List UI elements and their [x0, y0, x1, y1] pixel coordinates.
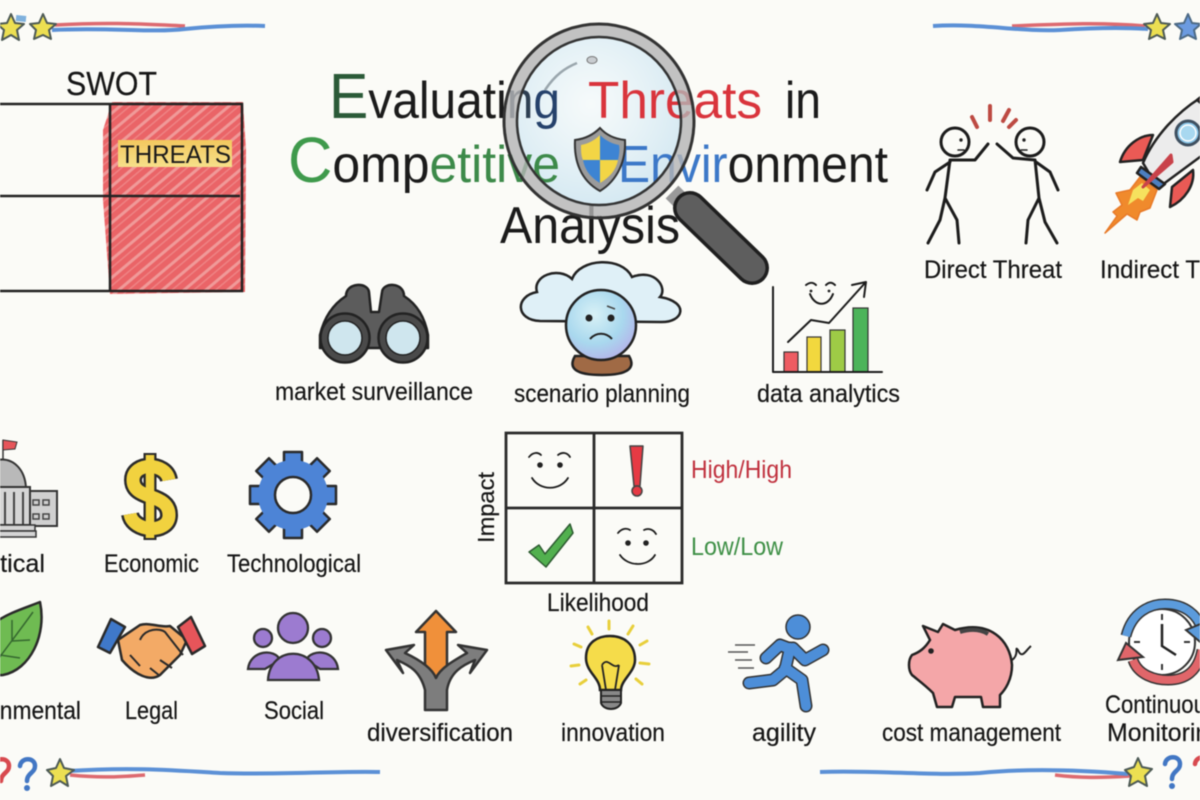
panel: SWOT matrix — [0, 65, 246, 294]
label: innovation — [561, 719, 665, 747]
label: Legal — [125, 697, 178, 725]
icon: group of people — [248, 613, 338, 680]
PESTEL: economic — [104, 453, 199, 578]
label: Economic — [104, 550, 199, 578]
title: Analysis — [500, 197, 680, 255]
icon: handshake — [98, 617, 205, 678]
label: diversification — [367, 719, 513, 747]
title: Competitive — [288, 124, 560, 196]
top left star border — [0, 14, 265, 40]
icon: bar chart with smile — [773, 282, 882, 372]
PESTEL: technological — [227, 452, 361, 578]
icon: check mark — [529, 524, 573, 567]
tool: data analytics — [757, 282, 900, 408]
matrix grid — [506, 433, 682, 583]
strategy: innovation — [561, 621, 665, 747]
title: Environment — [618, 136, 889, 194]
bottom left border with question marks — [0, 759, 380, 791]
PESTEL: political — [0, 440, 57, 578]
matrix grid lines — [0, 104, 242, 291]
icon: smiley — [529, 453, 570, 488]
PESTEL: environmental — [0, 602, 81, 725]
icon: leaf — [0, 602, 42, 675]
icon: binoculars — [320, 285, 428, 362]
icon: stick figures high five — [927, 106, 1058, 243]
icon: light bulb — [571, 621, 649, 709]
label: Social — [264, 697, 324, 725]
label: market surveillance — [275, 378, 473, 406]
magnifier lens glass — [515, 35, 683, 207]
top right star border — [933, 14, 1200, 39]
icon: gear — [250, 452, 336, 538]
tool: market surveillance — [275, 285, 473, 406]
threat type: indirect threat — [1100, 88, 1200, 284]
label: Direct Threat — [924, 256, 1062, 284]
threats quadrant fill — [103, 102, 246, 294]
strategy: diversification — [367, 611, 513, 747]
axis label: impact: Impact — [473, 471, 499, 543]
label: Technological — [227, 550, 361, 578]
handle — [672, 192, 752, 268]
continuous monitoring — [1105, 604, 1200, 747]
label: scenario planning — [514, 380, 690, 408]
icon: smiley low — [618, 529, 656, 564]
icon: crystal ball in cloud — [521, 262, 680, 375]
icon: running figure — [728, 615, 823, 706]
tool: scenario planning — [514, 262, 690, 408]
heading: SWOT: SWOT — [66, 65, 157, 102]
threat type: direct threat — [924, 106, 1062, 284]
icon: magnifying glass with shield — [504, 24, 752, 268]
strategy: agility — [728, 615, 823, 747]
title: in — [785, 72, 821, 130]
label: data analytics — [757, 380, 900, 408]
icon: three way arrows — [386, 611, 487, 710]
icon: rocket — [1105, 88, 1200, 233]
title: Threats — [588, 72, 762, 130]
label: agility — [752, 719, 816, 747]
icon: exclamation mark — [630, 446, 643, 496]
label: cost management — [882, 719, 1061, 747]
label: low/low: Low/Low — [691, 533, 784, 561]
risk matrix — [473, 433, 792, 617]
bottom right border with question marks — [820, 757, 1200, 789]
icon: piggy bank — [909, 624, 1031, 707]
lens ring — [504, 24, 694, 218]
shield — [575, 128, 625, 191]
icon: dollar sign — [130, 453, 169, 540]
PESTEL: legal — [98, 617, 205, 725]
PESTEL: social — [248, 613, 338, 725]
title — [288, 60, 889, 255]
strategy: cost management — [882, 624, 1061, 747]
icon: capitol building — [0, 440, 57, 537]
label — [1105, 691, 1200, 747]
title: Evaluating — [329, 60, 560, 132]
label: high/high: High/High — [691, 456, 792, 484]
axis label: likelihood: Likelihood — [547, 589, 649, 617]
threats label: THREATS — [120, 141, 231, 169]
icon: clock with cycle arrows — [1118, 604, 1200, 680]
